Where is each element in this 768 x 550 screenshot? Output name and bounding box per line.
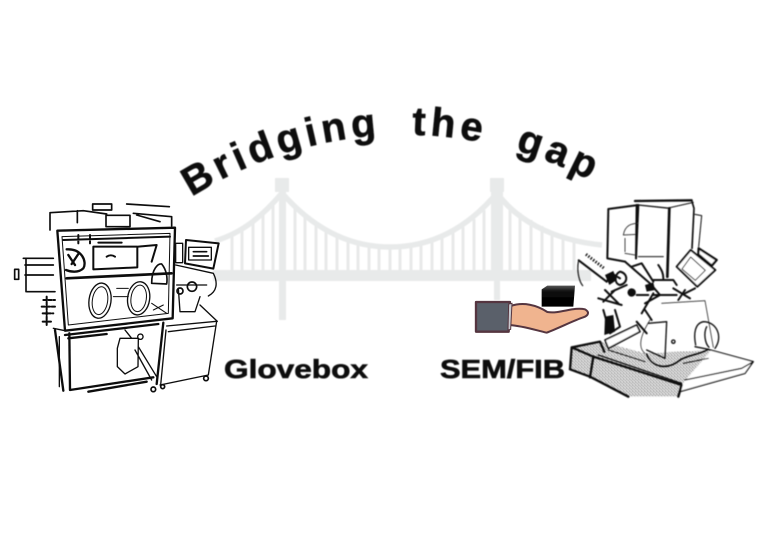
bridge hangers xyxy=(232,204,574,272)
glovebox right cabinet xyxy=(160,305,217,385)
glovebox glove ports xyxy=(87,282,113,320)
sleeve cuff xyxy=(476,302,510,332)
glovebox wheel xyxy=(66,249,85,272)
SEM base plate xyxy=(570,342,753,397)
SEM left panel xyxy=(607,205,638,262)
hand holding sample xyxy=(476,286,588,333)
SEM/FIB illustration xyxy=(570,200,753,397)
SEM ladder arm xyxy=(586,254,605,269)
SEM upper tangle xyxy=(603,262,695,303)
glovebox main chamber xyxy=(57,228,175,331)
bridge tower right xyxy=(490,178,504,300)
SEM side port xyxy=(695,322,719,349)
glovebox stand xyxy=(55,323,163,392)
glovebox top fittings xyxy=(50,204,172,230)
bridge xyxy=(213,178,602,320)
glovebox upper shelf xyxy=(67,273,172,278)
glovebox left cylinder xyxy=(15,258,55,292)
SEM stage curve xyxy=(647,349,708,366)
title: curved heading: Bridging the gap xyxy=(179,106,596,196)
glovebox valves xyxy=(42,297,55,325)
glovebox dome xyxy=(152,264,167,284)
SEM upper section: column, detector and arm xyxy=(578,200,717,303)
glovebox monitor xyxy=(185,240,219,269)
label: Glovebox: Glovebox xyxy=(224,354,369,384)
label: SEM/FIB: SEM/FIB xyxy=(440,354,565,384)
SEM detector xyxy=(677,250,715,287)
bridge cables xyxy=(215,193,602,247)
SEM stage tube xyxy=(605,325,640,348)
glovebox pipework and gauge xyxy=(176,243,216,312)
bridge tower left xyxy=(275,178,289,320)
glovebox bottle xyxy=(117,330,157,380)
SEM lower tangle xyxy=(598,290,685,333)
SEM main column xyxy=(638,205,670,208)
sample block xyxy=(542,286,575,307)
bridge deck xyxy=(213,270,591,281)
SEM chamber body xyxy=(641,301,713,353)
glovebox illustration xyxy=(15,204,219,392)
hand xyxy=(509,304,588,333)
SEM lower section: base and chamber xyxy=(570,290,753,397)
